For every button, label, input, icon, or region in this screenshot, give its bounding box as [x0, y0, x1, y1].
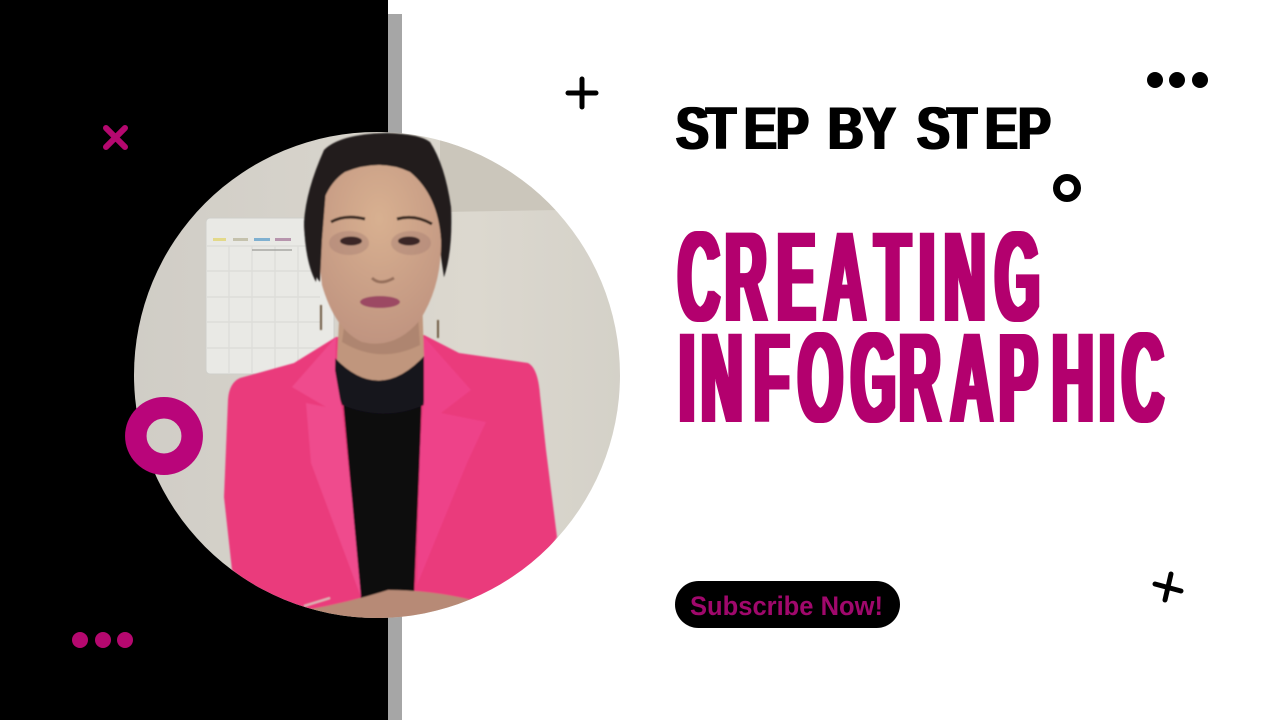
circular photo of presenter: [134, 132, 620, 630]
blouse: [342, 390, 422, 600]
lapel right: [417, 337, 486, 585]
black dots: [1147, 72, 1208, 88]
hair side: [303, 196, 446, 282]
magenta dots: [72, 632, 133, 648]
subscribe button: Subscribe Now!: [690, 591, 883, 621]
eye shadow: [329, 231, 369, 255]
face: [317, 165, 441, 344]
neck: [336, 316, 425, 382]
title: infographic: INFOGRAPHIC: [679, 307, 1164, 450]
title: creating: CREATING: [678, 206, 1040, 349]
calendar whiteboard: [206, 218, 334, 374]
black ring: [1056, 178, 1078, 198]
hands: [310, 588, 471, 618]
hair: [304, 133, 451, 282]
wall: [134, 132, 620, 618]
neck shadow: [342, 323, 420, 354]
magenta ring: [136, 408, 192, 464]
blouse collar: [335, 354, 426, 414]
tilted plus icon: [1155, 574, 1181, 600]
blazer body: [224, 335, 557, 630]
magenta x icon: [106, 128, 125, 147]
grey stripe: [388, 14, 402, 720]
lips: [360, 296, 400, 308]
heading: step by step: STEP BY STEP: [676, 94, 1051, 162]
bracelet: [304, 598, 330, 606]
eye right: [398, 236, 420, 246]
black panel: [0, 0, 388, 720]
nose: [372, 278, 394, 282]
eye left: [340, 236, 362, 246]
subscribe button: [675, 581, 900, 628]
eyebrows: [331, 217, 432, 224]
wall top shade: [440, 140, 556, 212]
presenter: [224, 133, 557, 630]
earrings: [321, 305, 438, 338]
lapel left: [292, 337, 361, 597]
black plus icon: [568, 79, 596, 107]
